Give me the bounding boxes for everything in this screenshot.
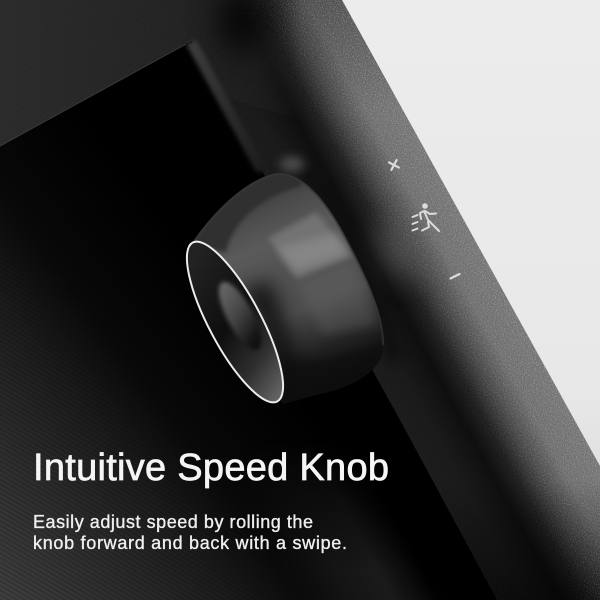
description text: knob forward and back with a swipe.: [33, 533, 347, 553]
title: Intuitive Speed Knob: [33, 447, 389, 489]
icon: minus: [450, 274, 460, 278]
recessed deck: [0, 41, 496, 600]
touch controls: [387, 158, 460, 278]
knob body: [192, 173, 384, 404]
knob: [186, 173, 384, 404]
icon: running person with speed lines: [412, 203, 439, 231]
recess edge line: [0, 44, 186, 146]
top-left panel: [0, 0, 300, 146]
description text: [33, 512, 347, 553]
shading on body: [260, 0, 600, 600]
description text: Easily adjust speed by rolling the: [33, 512, 313, 532]
dark shadow at top of panel: [217, 0, 269, 54]
knob front face: [170, 230, 300, 414]
glowing ring: [170, 230, 300, 414]
knob highlights: [194, 173, 384, 389]
recess right ridge: [186, 40, 268, 172]
knob centre dome: [211, 276, 269, 356]
icon: plus: [387, 158, 401, 172]
